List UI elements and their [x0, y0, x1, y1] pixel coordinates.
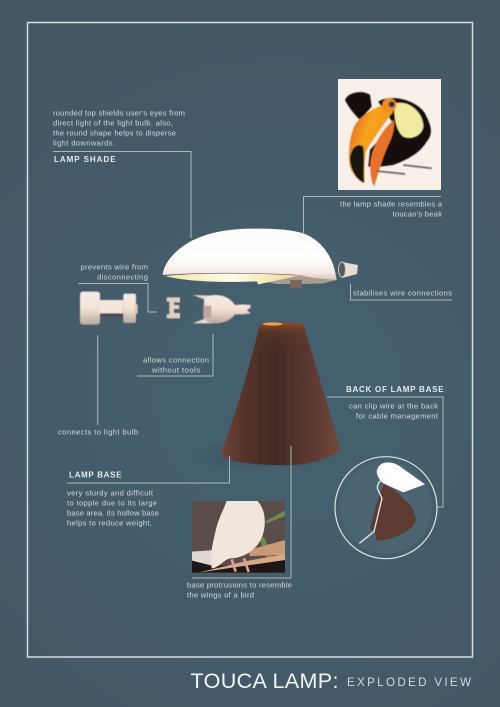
quick-connect plug: [193, 295, 251, 323]
leader line: [327, 397, 443, 507]
callout: toucan's beak: [304, 196, 443, 233]
callout: back of lamp base: [327, 385, 444, 507]
leader line: [97, 335, 99, 425]
subtitle: EXPLODED VIEW: [347, 676, 471, 689]
lamp shade: [163, 229, 337, 288]
small lamp shade: [377, 462, 425, 492]
leader line: [67, 456, 230, 483]
caption: the wings of a bird: [187, 590, 254, 600]
description: [349, 402, 439, 420]
leader line: [350, 284, 452, 300]
callout: connects to light bulb: [58, 335, 138, 436]
lamp shade leader line: [53, 152, 191, 238]
lamp shade description: the round shape helps to disperse: [53, 128, 176, 138]
leader line: [137, 334, 213, 376]
lamp shade description: light downwards.: [53, 138, 115, 148]
light bulb connector: [80, 292, 138, 325]
description: for cable management: [356, 412, 439, 420]
description: base area. its hollow base: [67, 508, 159, 518]
caption: base protrusions to resemble: [187, 580, 292, 590]
leader line: [192, 446, 291, 578]
bird photo: [192, 501, 285, 573]
heading: BACK OF LAMP BASE: [346, 385, 444, 394]
wire connector cap: [338, 262, 358, 278]
callout: prevents wire from disconnecting: [78, 262, 157, 312]
lamp shade heading: LAMP SHADE: [54, 155, 116, 164]
description: [67, 488, 159, 528]
caption: allows connection: [143, 356, 209, 364]
toucan photo: [338, 79, 441, 190]
caption: connects to light bulb: [58, 428, 138, 436]
inset: back view of lamp: [335, 457, 437, 559]
toucan caption: toucan's beak: [392, 210, 442, 218]
leader line: [78, 284, 157, 312]
heading: LAMP BASE: [69, 470, 122, 480]
lamp shade description: direct light of the light bulb. also,: [53, 118, 173, 128]
description: to topple due to its large: [67, 498, 157, 508]
description: very sturdy and difficult: [67, 488, 154, 498]
callout: stabilises wire connections: [350, 284, 452, 300]
caption: stabilises wire connections: [353, 288, 452, 298]
frame: [28, 22, 472, 657]
caption: prevents wire from: [80, 262, 148, 272]
wire: [359, 478, 385, 543]
description: can clip wire at the back: [349, 402, 438, 410]
toucan caption: [340, 200, 443, 218]
caption: [143, 356, 209, 374]
lamp shade description: rounded top shields user's eyes from: [53, 108, 185, 118]
description: helps to reduce weight.: [67, 518, 152, 528]
callout: bird wings: [187, 446, 292, 600]
caption: disconnecting: [97, 272, 148, 282]
callout: lamp base: [67, 456, 230, 528]
lamp shade description: [53, 108, 185, 148]
caption: without tools: [151, 366, 200, 374]
toucan leader line: [304, 196, 441, 233]
caption: [187, 580, 292, 600]
title: [190, 669, 471, 693]
retaining clip: [167, 297, 180, 318]
caption: [80, 262, 148, 282]
toucan caption: the lamp shade resembles a: [340, 200, 443, 208]
callout: lamp shade: [53, 108, 191, 238]
lamp base: [200, 322, 341, 465]
callout: allows connection: [137, 334, 213, 376]
title: TOUCA LAMP:: [190, 669, 338, 693]
small lamp base: [370, 483, 416, 541]
